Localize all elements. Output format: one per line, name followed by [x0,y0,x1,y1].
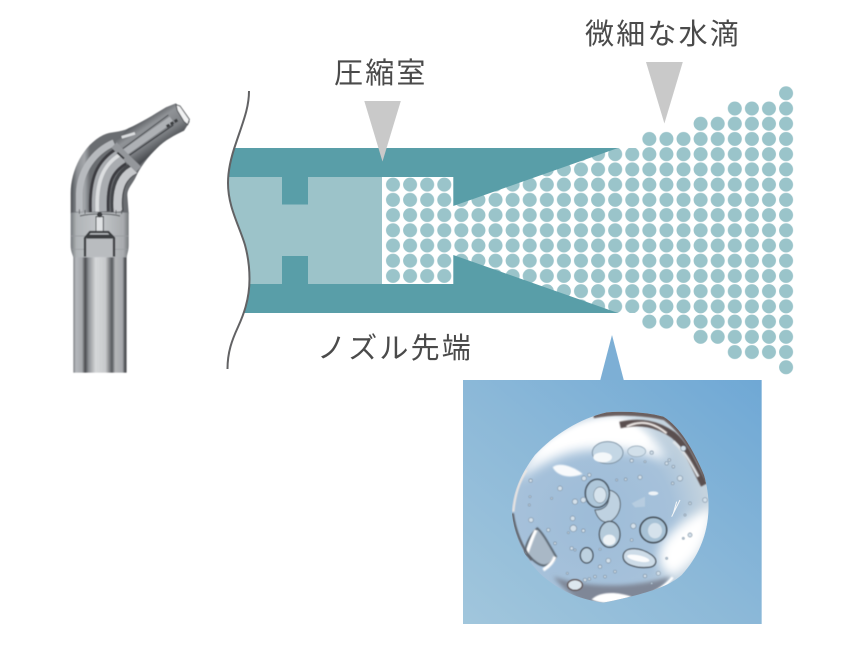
arrow: fine droplets [646,62,683,124]
neck shading [115,103,190,165]
lens highlight [553,465,583,476]
top white band [517,415,667,480]
photo background [463,380,762,624]
nozzle shaft [73,248,127,373]
dark rim streaks [593,413,707,480]
nozzle photo [71,103,190,373]
wavy cut line [228,91,250,369]
chamber water [220,177,382,284]
right white glow [659,507,713,577]
elbow body [71,103,190,213]
label: nozzle tip: ノズル先端 [317,332,473,365]
lower gray band [554,575,670,602]
label: compression chamber: 圧縮室 [334,57,428,90]
collar [71,213,129,257]
droplet photo [463,380,762,624]
piston notches [282,177,308,284]
cross-section diagram [220,86,795,375]
arrow: to droplet photo [600,335,624,381]
inner plug [85,233,114,257]
bent tubes [99,156,122,212]
label: fine droplets: 微細な水滴 [585,18,741,51]
nozzle wall and compression chamber [220,148,618,313]
arrow: compression chamber [364,101,401,162]
joint ring [114,145,138,169]
upper wall [220,148,618,206]
lower wall [220,255,618,313]
water droplet dots [382,86,795,375]
neck inner pipe [123,119,172,154]
left lower lobe [525,528,556,565]
upper shell highlight [79,143,114,212]
water drop [512,412,708,602]
nozzle tip [176,105,189,125]
tiny bubbles [528,446,707,584]
bubbles [568,442,667,590]
